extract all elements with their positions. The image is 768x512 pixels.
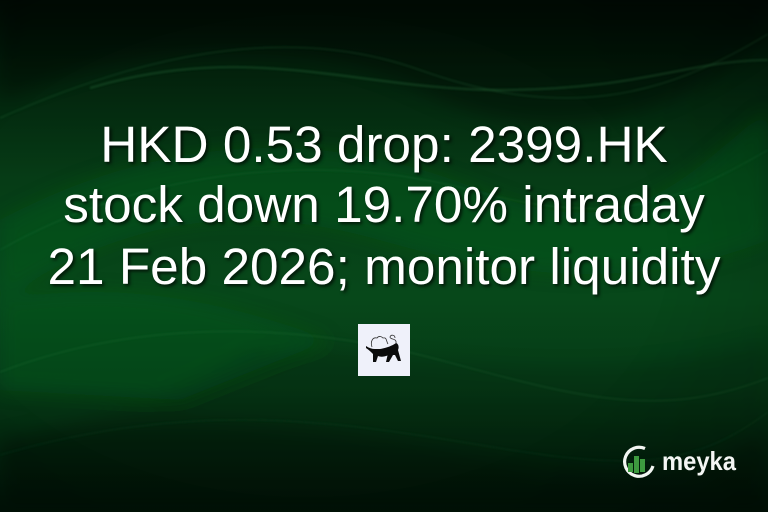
logo: meyka: [623, 446, 736, 478]
title: HKD 0.53 drop: 2399.HK: [100, 116, 668, 173]
icon: ring with chart bars: [625, 447, 653, 476]
icon: company logo with panther: [358, 324, 410, 376]
title: 21 Feb 2026; monitor liquidity: [48, 238, 720, 295]
title: stock down 19.70% intraday: [63, 176, 705, 233]
title: [48, 116, 723, 298]
